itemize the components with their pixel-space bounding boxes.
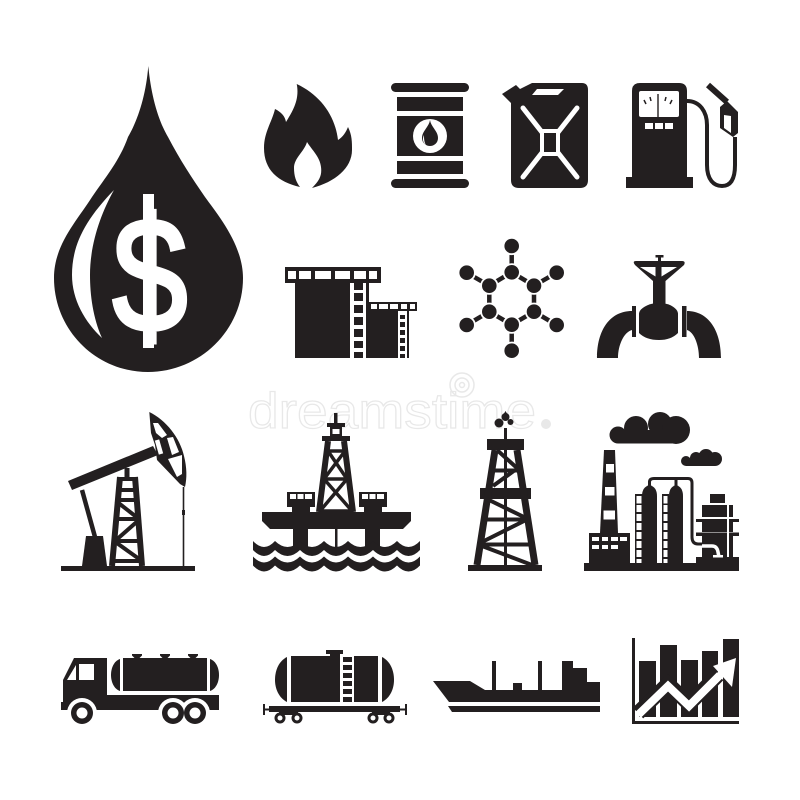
icon: fuel pump: [626, 83, 738, 188]
icon: oil drop with dollar: [54, 66, 243, 372]
icon: hexagonal molecule: [458, 238, 565, 359]
watermark: dreamstime: [248, 383, 536, 439]
icon: pumpjack: [61, 412, 195, 571]
icon: jerrycan: [502, 83, 588, 188]
icon: oil drop with dollar: $: [113, 184, 187, 366]
icon: storage tanks: [285, 267, 417, 358]
icon: rail tank car: [263, 650, 407, 724]
icon: flame: [264, 84, 352, 188]
icon: pipeline valve: [597, 255, 721, 358]
icon: oil barrel: [391, 83, 469, 188]
icon: rising bar chart: [632, 638, 739, 724]
icon: tanker ship: [433, 661, 600, 712]
icon: refinery: [584, 412, 739, 571]
icon: offshore platform: [253, 413, 420, 572]
icon: tanker truck: [61, 654, 219, 728]
icon: oil derrick: [468, 411, 542, 571]
